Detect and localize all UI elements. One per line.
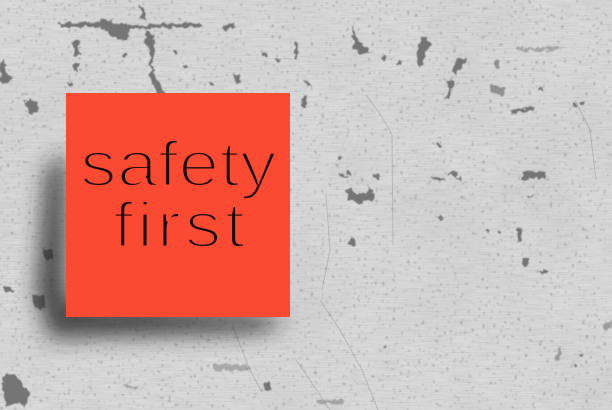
note shadow on wall — [36, 150, 285, 338]
handwritten text: first: first — [113, 189, 245, 261]
handwritten text: safety: safety — [80, 128, 277, 200]
hairline cracks — [232, 95, 596, 410]
red sticky note — [66, 93, 290, 317]
